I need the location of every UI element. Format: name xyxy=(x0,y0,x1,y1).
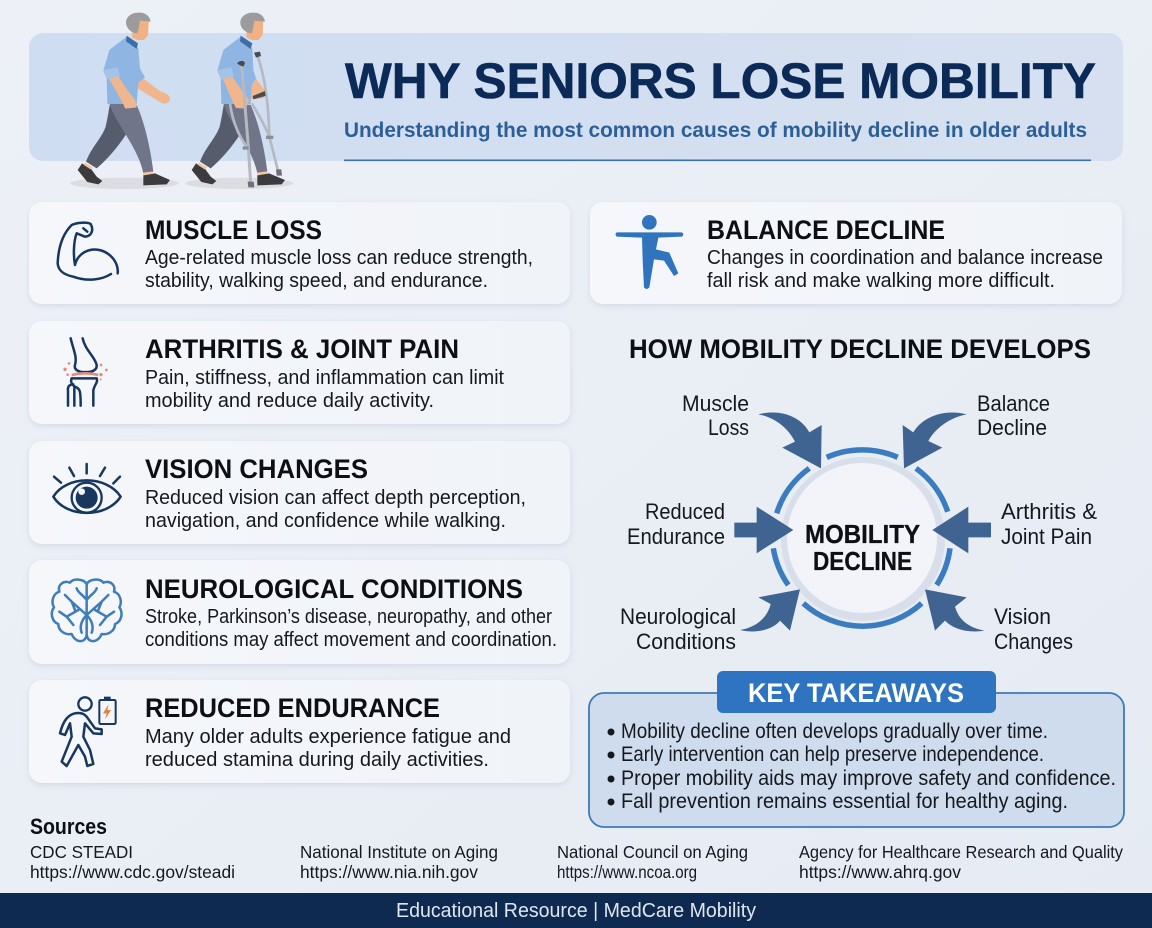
icon: brain xyxy=(52,580,121,641)
heading: BALANCE DECLINE xyxy=(707,215,945,245)
card: muscle loss xyxy=(29,202,570,304)
label: balance decline: Decline xyxy=(977,415,1047,440)
heading: NEUROLOGICAL CONDITIONS xyxy=(145,574,523,604)
icon: walker with low battery xyxy=(60,697,116,766)
source: AHRQ: https://www.ahrq.gov xyxy=(799,862,961,882)
description: Many older adults experience fatigue and xyxy=(145,726,511,748)
icon: balancing figure xyxy=(615,215,683,289)
source: AHRQ: Agency for Healthcare Research and Quality xyxy=(799,842,1123,862)
heading: MUSCLE LOSS xyxy=(145,215,322,245)
icon: knee joint xyxy=(63,338,108,406)
description: conditions may affect movement and coordination. xyxy=(145,629,557,651)
sources xyxy=(30,814,1123,882)
description: navigation, and confidence while walking. xyxy=(145,510,506,532)
label: neurological conditions: Conditions xyxy=(636,629,736,654)
takeaways list: Fall prevention remains essential for healthy aging. xyxy=(621,790,1068,813)
description: Age-related muscle loss can reduce strength, xyxy=(145,247,533,269)
card: neurological conditions xyxy=(29,560,570,664)
description: reduced stamina during daily activities. xyxy=(145,749,489,771)
description: Pain, stiffness, and inflammation can limit xyxy=(145,367,504,389)
heading: REDUCED ENDURANCE xyxy=(145,693,440,723)
panel: key takeaways xyxy=(589,671,1124,827)
icon: flexed arm xyxy=(58,223,118,280)
subtitle: Understanding the most common causes of mobility decline in older adults xyxy=(344,119,1087,142)
source: NCOA: National Council on Aging xyxy=(557,842,748,862)
section heading: how mobility decline develops: HOW MOBILITY DECLINE DEVELOPS xyxy=(629,334,1091,364)
title: WHY SENIORS LOSE MOBILITY xyxy=(345,53,1096,109)
centre label: DECLINE xyxy=(813,546,912,576)
takeaways list xyxy=(608,720,1116,813)
label: arthritis and joint pain: Joint Pain xyxy=(1001,524,1092,549)
footer bar xyxy=(0,893,1152,928)
label: arthritis and joint pain: Arthritis & xyxy=(1001,499,1097,524)
label: neurological conditions: Neurological xyxy=(620,604,736,629)
diagram: causes converging on mobility decline xyxy=(620,391,1097,654)
source: NCOA: https://www.ncoa.org xyxy=(557,862,697,882)
takeaways badge xyxy=(717,671,996,713)
source: NIA: National Institute on Aging xyxy=(300,842,498,862)
footer bar: Educational Resource | MedCare Mobility xyxy=(396,900,756,922)
description: Stroke, Parkinson’s disease, neuropathy, and other xyxy=(145,606,552,628)
label: muscle loss: Loss xyxy=(708,415,749,440)
description: mobility and reduce daily activity. xyxy=(145,390,434,412)
heading: VISION CHANGES xyxy=(145,454,368,484)
takeaways badge: KEY TAKEAWAYS xyxy=(748,678,964,708)
sources: Sources xyxy=(30,814,107,839)
label: muscle loss: Muscle xyxy=(682,391,749,416)
takeaways list: Early intervention can help preserve independence. xyxy=(621,743,1044,766)
illustration: senior walking unaided xyxy=(70,13,179,189)
takeaways list: Mobility decline often develops gradually over time. xyxy=(621,720,1048,743)
label: vision changes: Changes xyxy=(994,629,1073,654)
ring segments xyxy=(773,450,950,626)
source: CDC: https://www.cdc.gov/steadi xyxy=(30,862,235,882)
description: Changes in coordination and balance increase xyxy=(707,247,1103,269)
label: reduced endurance: Endurance xyxy=(627,524,725,549)
illustration: senior walking with crutches xyxy=(185,13,293,189)
header banner xyxy=(29,33,1123,161)
card: balance decline xyxy=(590,202,1122,304)
description: Reduced vision can affect depth perception, xyxy=(145,487,526,509)
heading: ARTHRITIS & JOINT PAIN xyxy=(145,334,459,364)
arrows xyxy=(734,413,991,631)
icon: eye xyxy=(53,464,121,513)
source: NIA: https://www.nia.nih.gov xyxy=(300,862,478,882)
label: reduced endurance: Reduced xyxy=(645,499,725,524)
card: vision changes xyxy=(29,441,570,544)
takeaways list: Proper mobility aids may improve safety and confidence. xyxy=(621,767,1116,790)
card: arthritis and joint pain xyxy=(29,321,570,424)
source: CDC: CDC STEADI xyxy=(30,842,133,862)
label: balance decline: Balance xyxy=(977,391,1050,416)
description: fall risk and make walking more difficult. xyxy=(707,270,1055,292)
card: reduced endurance xyxy=(29,680,570,783)
label: vision changes: Vision xyxy=(994,604,1051,629)
centre label: MOBILITY xyxy=(805,519,920,549)
description: stability, walking speed, and endurance. xyxy=(145,270,488,292)
